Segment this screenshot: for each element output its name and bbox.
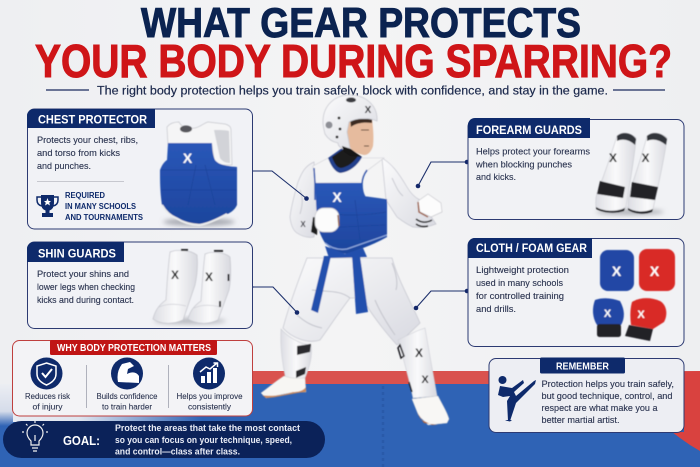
text: helps you improve <box>176 391 243 412</box>
heading: cloth and foam gear <box>468 238 592 258</box>
text: reduces risk of injury <box>25 391 71 412</box>
chest protector on figure <box>315 183 387 254</box>
text: goal label: GOAL: <box>63 434 100 448</box>
text: remember description <box>542 379 674 425</box>
text: required in many schools: IN MANY SCHOOLS <box>65 202 137 211</box>
text: shin guards description <box>37 269 135 305</box>
helmet logo: X <box>365 105 372 116</box>
right glove <box>416 194 442 227</box>
right shin guard <box>398 328 437 398</box>
logos: forearm guards: X <box>609 151 617 165</box>
text: shin guards description: Protect your shins and <box>37 269 129 279</box>
right foot <box>412 396 449 425</box>
right shin guard logo: X <box>415 346 423 360</box>
connector: forearm guards <box>416 160 469 188</box>
left shin guard <box>281 329 312 380</box>
heading: chest protector: CHEST PROTECTOR <box>38 112 147 126</box>
forearm guard logo: X <box>300 220 306 229</box>
text: remember description: respect are what make you a <box>542 403 658 413</box>
logos: shin guards: X <box>171 268 179 282</box>
illustration: gloves and pads: X <box>604 308 612 320</box>
text: cloth and foam gear description <box>476 265 569 314</box>
illustration: gloves and pads: X <box>650 263 660 279</box>
subtitle: The right body protection helps you train safely, block with confidence, and stay in the game. <box>97 86 608 98</box>
panel: forearm guards <box>468 118 684 220</box>
heading: remember <box>540 358 625 374</box>
illustration: shin guards: X <box>205 270 213 284</box>
right shin guard lower logo: X <box>421 374 429 386</box>
connector: shin guards <box>249 285 299 315</box>
text: remember description: better martial artist. <box>542 415 620 425</box>
panel: why body protection matters <box>12 340 252 416</box>
illustration: forearm guards: X <box>641 151 650 165</box>
logo: chest protector: X <box>183 150 193 166</box>
heading: cloth and foam gear: CLOTH / FOAM GEAR <box>476 241 587 255</box>
illustration: forearm guards <box>596 133 667 215</box>
connector: chest protector <box>248 169 309 201</box>
illustration: gloves and pads: X <box>637 309 645 321</box>
text: required in many schools: REQUIRED <box>65 191 105 200</box>
panel: shin guards <box>27 242 252 328</box>
text: builds confidence: to train harder <box>102 402 152 412</box>
vest logo: X <box>332 189 342 205</box>
text: cloth and foam gear description: and drills. <box>476 304 516 314</box>
text: builds confidence <box>96 391 158 412</box>
text: cloth and foam gear description: for controlled training <box>476 291 564 301</box>
left foot <box>261 376 306 398</box>
title <box>35 0 672 87</box>
text: reduces risk of injury: Reduces risk <box>25 391 71 401</box>
text: required in many schools: AND TOURNAMENTS <box>65 213 144 222</box>
logos: gloves and pads: X <box>612 263 622 279</box>
illustration: gloves and pads <box>593 249 675 341</box>
sparring mat <box>0 371 700 467</box>
heading: why body protection matters <box>50 340 217 355</box>
text: chest protector description: Protects your chest, ribs, <box>37 135 138 145</box>
text: remember description: Protection helps you train safely, <box>542 379 674 389</box>
icon: shield <box>30 358 62 390</box>
panel: cloth and foam gear <box>468 238 684 346</box>
connector: cloth and foam gear <box>414 289 469 310</box>
central figure: martial artist in gear <box>261 95 449 425</box>
neck and collar <box>328 146 362 173</box>
illustration: shin guards <box>153 250 231 324</box>
heading: shin guards: SHIN GUARDS <box>38 246 116 260</box>
sleeve left <box>290 162 318 237</box>
trousers <box>283 258 420 345</box>
text: goal description: and control—class after class. <box>115 446 240 456</box>
heading: shin guards <box>27 242 124 262</box>
text: chest protector description: and punches. <box>37 161 91 171</box>
text: remember description: but good technique, control, and <box>542 391 672 401</box>
text: helps you improve: consistently <box>188 402 232 412</box>
helmet <box>323 95 377 149</box>
panel: goal <box>3 421 325 458</box>
heading: why body protection matters: WHY BODY PROTECTION MATTERS <box>57 343 211 354</box>
heading: forearm guards: FOREARM GUARDS <box>476 123 582 137</box>
face <box>346 119 373 155</box>
text: goal description: so you can focus on your technique, speed, <box>115 435 292 445</box>
text: chest protector description: and torso from kicks <box>37 148 121 158</box>
title: WHAT GEAR PROTECTS <box>141 0 581 46</box>
text: forearm guards description <box>475 146 591 182</box>
text: cloth and foam gear description: used in many schools <box>476 278 564 288</box>
text: shin guards description: lower legs when checking <box>37 282 135 292</box>
icon: kicking martial artist <box>498 376 536 422</box>
illustration: chest protector <box>160 122 237 226</box>
text: required in many schools <box>65 191 144 222</box>
vest upper <box>313 157 384 183</box>
text: builds confidence: Builds confidence <box>96 391 158 401</box>
text: forearm guards description: Helps protect your forearms <box>476 146 591 156</box>
icon: flexed arm <box>111 358 143 390</box>
text: goal description: Protect the areas that take the most contact <box>115 423 300 433</box>
heading: remember: REMEMBER <box>556 362 610 372</box>
panel: remember <box>489 358 684 432</box>
left glove <box>311 208 339 235</box>
icon: light bulb <box>22 421 48 451</box>
belt <box>325 246 367 258</box>
text: goal description <box>115 423 300 456</box>
heading: chest protector <box>27 109 155 128</box>
text: helps you improve: Helps you improve <box>176 391 243 401</box>
panel: chest protector <box>27 109 252 229</box>
text: reduces risk of injury: of injury <box>32 402 63 412</box>
icon: rising bar chart <box>193 358 225 390</box>
text: forearm guards description: when blocking punches <box>475 160 572 170</box>
heading: forearm guards <box>468 118 590 138</box>
text: forearm guards description: and kicks. <box>476 172 516 182</box>
icon: trophy <box>37 195 58 217</box>
text: shin guards description: kicks and during contact. <box>37 295 134 305</box>
sleeve right <box>382 158 436 227</box>
text: chest protector description <box>37 135 138 171</box>
text: cloth and foam gear description: Lightweight protection <box>476 265 569 275</box>
